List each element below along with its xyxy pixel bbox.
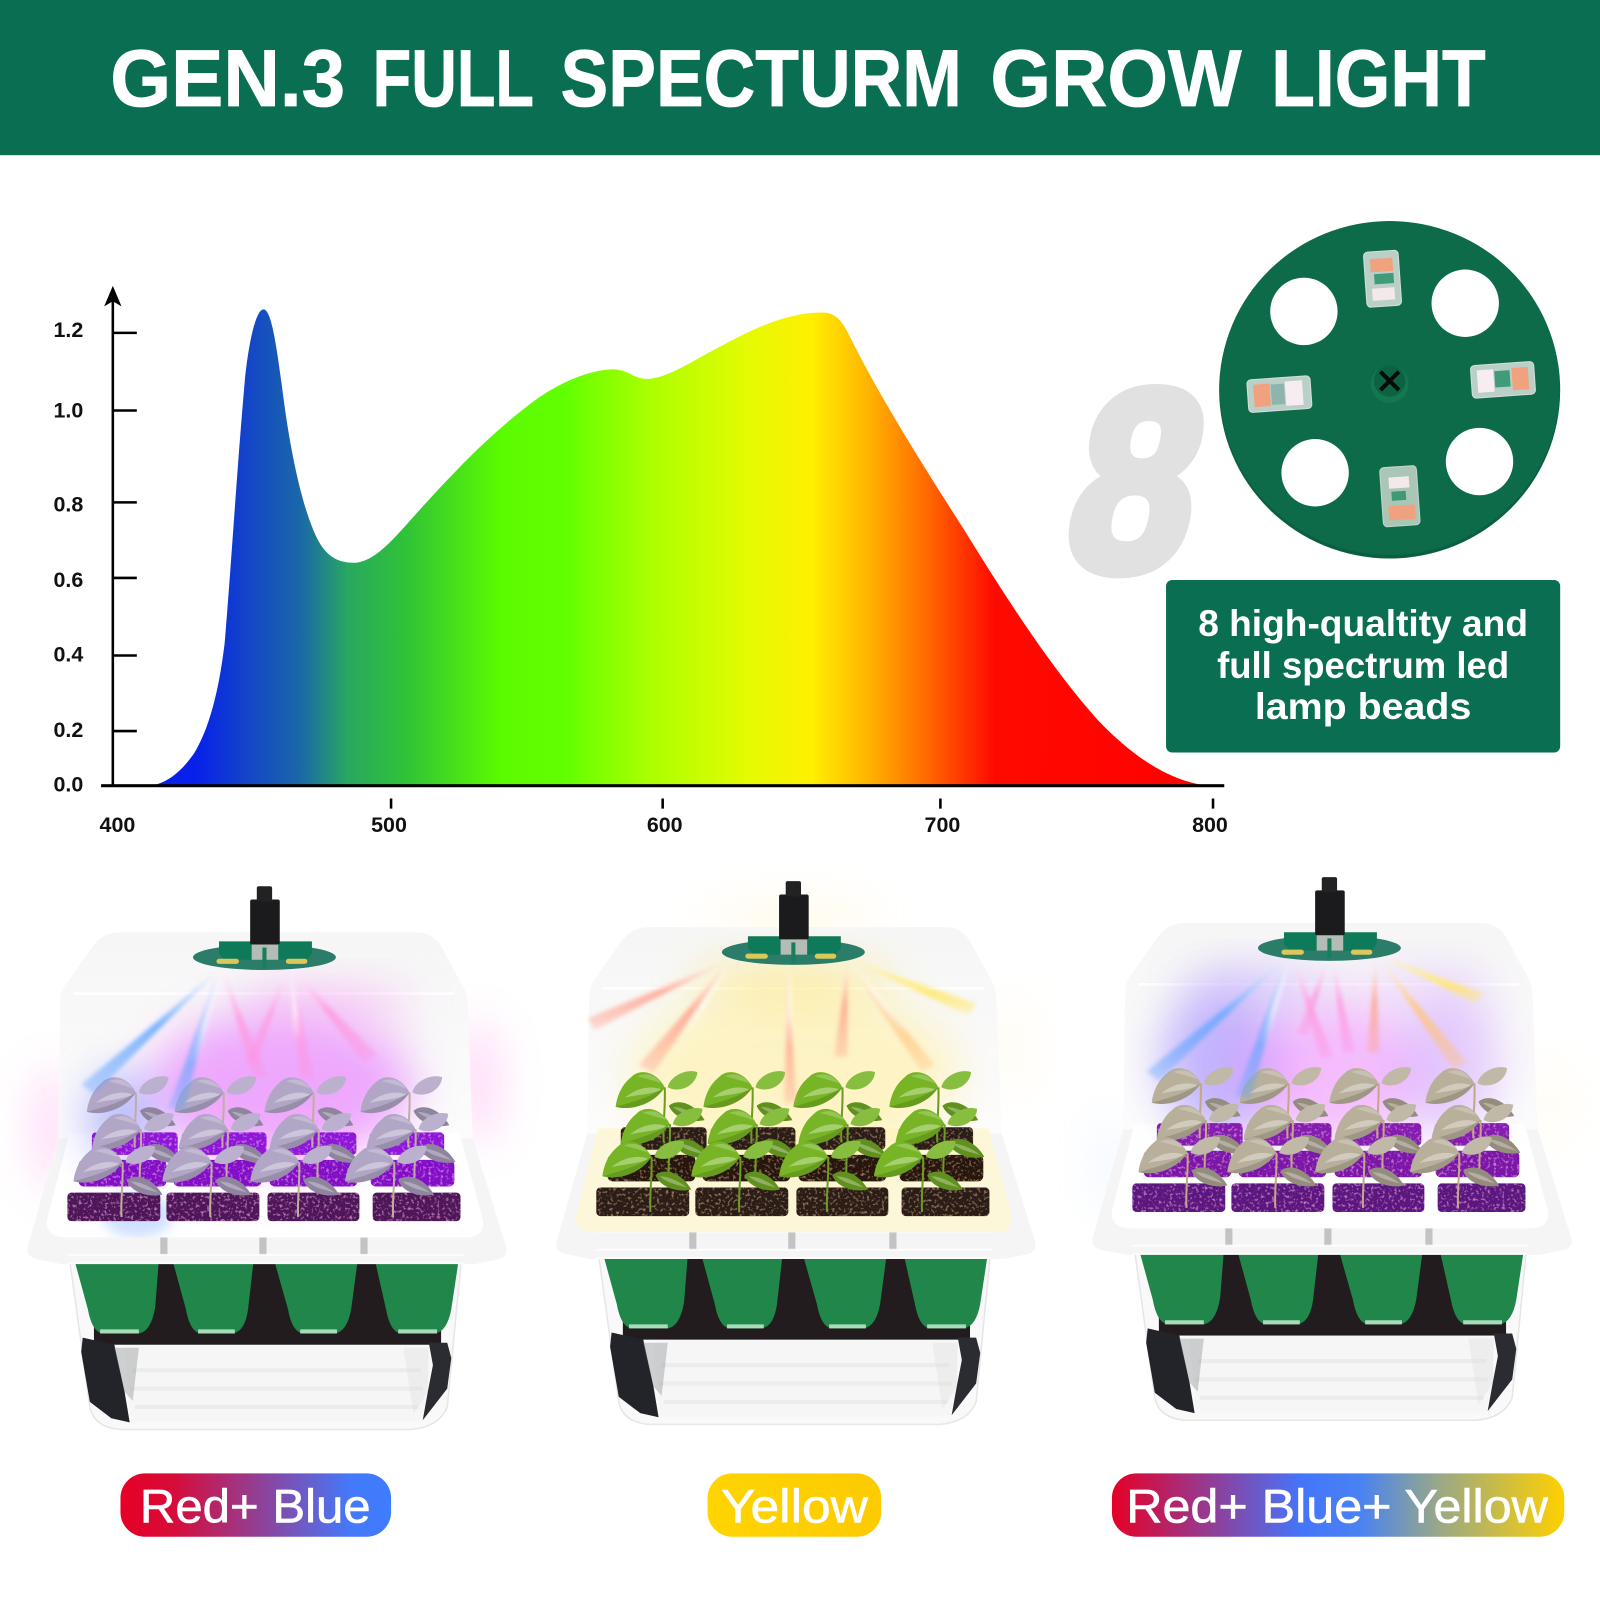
seedlings [74, 1076, 455, 1217]
callout text: lamp beads [1255, 686, 1471, 727]
dome colour wash [576, 962, 1012, 1232]
light rays [1147, 957, 1484, 1099]
light rays [82, 970, 378, 1111]
callout: LED beads [1166, 580, 1560, 753]
outer pink glow [37, 1021, 496, 1190]
label pill: red + blue: Red+ Blue [140, 1479, 371, 1532]
title [110, 34, 1486, 124]
y axis labels: 1.2 [54, 318, 83, 342]
x axis labels: 600 [647, 813, 683, 837]
outer yellow glow [701, 907, 1026, 1098]
y axis labels: 0.4 [54, 643, 83, 667]
title banner [0, 0, 1600, 155]
title: FULL [373, 34, 534, 124]
disc holes [1270, 270, 1513, 506]
LED bead right [1470, 361, 1536, 398]
x axis [101, 784, 1224, 787]
seedlings [602, 1071, 984, 1212]
label pill: yellow [708, 1473, 881, 1537]
tray base and pots [598, 1250, 990, 1424]
callout text [1198, 603, 1528, 727]
soil cells [1132, 1123, 1525, 1212]
LED lamp [193, 886, 336, 970]
centre screw [1371, 365, 1409, 403]
tray base and pots [69, 1255, 462, 1429]
dome and tray top [27, 932, 507, 1264]
outer multicolour glow [1097, 1058, 1564, 1216]
x axis labels: 800 [1192, 813, 1228, 837]
spectrum area [153, 309, 1205, 785]
y axis labels [54, 318, 83, 796]
unit: seed tray red + blue [27, 886, 507, 1429]
soil cells [67, 1132, 460, 1221]
y axis labels: 0.6 [54, 568, 83, 592]
y axis labels: 0.2 [54, 718, 83, 742]
LED disc [1219, 221, 1560, 559]
dome and tray top [556, 927, 1036, 1259]
label pill: yellow: Yellow [721, 1479, 869, 1532]
light rays [588, 961, 976, 1103]
callout text: full spectrum led [1217, 645, 1509, 686]
title: LIGHT [1271, 34, 1486, 124]
seedlings [1138, 1067, 1520, 1208]
unit: seed tray yellow [556, 881, 1036, 1424]
label pill: red + blue [120, 1473, 391, 1537]
LED bead bottom [1379, 465, 1420, 527]
x axis labels: 400 [100, 813, 135, 837]
x axis labels: 500 [371, 813, 407, 837]
tray base and pots [1134, 1246, 1526, 1420]
chart: light spectrum curve [54, 286, 1228, 837]
y axis [112, 298, 114, 785]
dome colour wash [87, 987, 414, 1238]
tick marks [112, 333, 1213, 809]
y axis labels: 1.0 [54, 399, 83, 423]
LED bead top [1363, 250, 1402, 307]
x axis labels: 700 [925, 813, 960, 837]
y axis labels: 0.8 [54, 493, 83, 517]
dome colour wash [1162, 968, 1499, 1145]
soil cells [596, 1127, 989, 1216]
title: GEN.3 [110, 34, 345, 124]
big gray number 8: 8 [1048, 337, 1227, 625]
title: GROW [990, 34, 1242, 124]
LED bead left [1247, 376, 1312, 413]
LED lamp [1258, 877, 1401, 961]
title: SPECTURM [561, 34, 962, 124]
y axis labels: 0.0 [54, 772, 83, 796]
dome and tray top [1092, 923, 1572, 1255]
y axis arrow [104, 286, 122, 306]
x axis labels [100, 813, 1228, 837]
LED lamp [722, 881, 865, 965]
unit: seed tray red + blue + yellow [1092, 877, 1572, 1420]
callout text: 8 high-qualtity and [1198, 603, 1528, 644]
label pill: red + blue + yellow: Red+ Blue+ Yellow [1126, 1479, 1549, 1532]
